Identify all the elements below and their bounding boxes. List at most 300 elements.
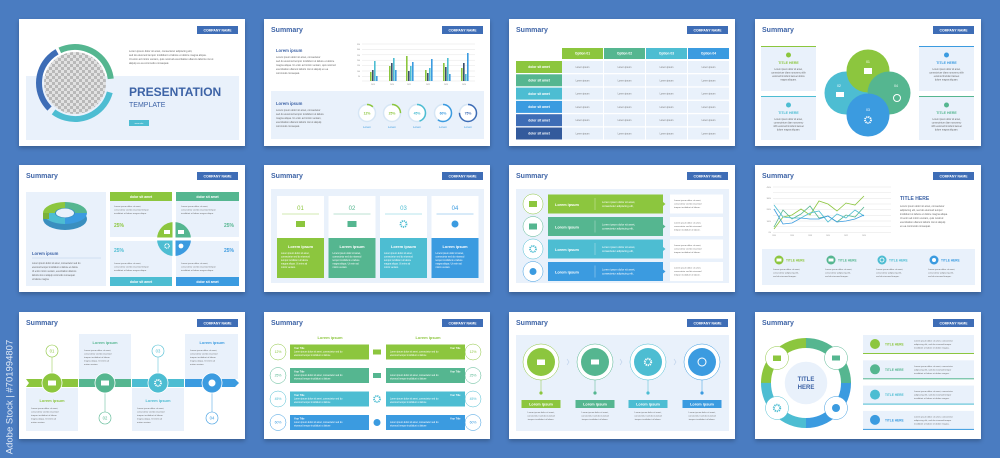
step panels: tempor incididunt ut labore [137,414,164,417]
right list: Lorem ipsum dolor sit amet, consectetur [914,390,953,393]
bar chart: 300 [357,49,360,51]
rows: 25% [470,374,476,378]
text block top: exercitation ullamco laboris nisi ut aliquip ex ea [276,68,329,71]
list rows: consectetur sed do eiusmod [674,270,702,273]
badge [442,172,483,180]
text block bottom: commodo consequat. [276,125,300,128]
rows: Your Title [450,347,461,350]
progress circles: 75% [465,111,471,115]
badge [197,319,238,327]
bottom panel items: Lorem ipsum dolor sit amet, [928,268,955,271]
heading: Summary [271,173,303,180]
table: Lorem ipsum [576,106,589,109]
bar chart: 150 [357,65,360,67]
progress circles: 60% [440,111,446,115]
bottom panel items: Lorem ipsum dolor sit amet, [825,268,852,271]
heading: Summary [516,320,548,327]
step panels: minim veniam. [31,422,45,424]
bottom panel items: TITLE HERE [889,258,908,262]
title [129,85,221,109]
quadrant cards: 25% [114,223,125,229]
progress circles: Lorem [439,125,448,129]
intro text: Lorem ipsum dolor sit amet, consectetur adipiscing elit, [129,49,192,53]
heading: Summary [516,173,548,180]
left panel with 3D donut [26,192,106,286]
left panel with 3D donut: Ut enim minim veniam, exercitation ullamco [32,270,77,273]
rows: Your Title [294,394,305,397]
venn circles: 03 [866,108,870,112]
step panels: Lorem ipsum [39,398,65,403]
badge [197,26,238,34]
table: Lorem ipsum [660,132,673,136]
cards: magna aliqua. Ut enim ad [332,262,359,266]
venn circles [824,50,910,136]
process steps: consectetur sed do eiusmod [634,414,662,418]
rows: eiusmod tempor incididunt ut labore [390,354,427,357]
badge: COMPANY NAME [449,322,477,326]
list rows: tempor incididunt ut labore. [674,274,701,276]
slide 7: list bars [509,165,735,292]
right list: adipiscing elit, sed do eiusmod tempor [914,394,951,397]
badge [442,319,483,327]
bottom panel items: TITLE HERE [941,258,960,262]
bottom panel items: consectetur adipiscing elit, [773,272,799,274]
progress circles: Lorem [363,125,372,129]
rows: eiusmod tempor incididunt ut labore [390,424,427,428]
line chart [767,187,891,237]
title text block: TITLE HERE [900,196,930,202]
heading: Summary [762,27,794,34]
list rows: Lorem ipsum dolor sit amet, [602,222,635,226]
table: Lorem ipsum [576,66,589,69]
quadrant cards: consectetur sed do eiusmod tempor [181,208,216,212]
process steps: Lorem ipsum [690,402,715,406]
process steps: Lorem ipsum dolor sit amet, [634,411,662,414]
list rows: Lorem ipsum dolor sit amet, [674,266,701,270]
cards: tempor incididunt ut labore [436,259,463,262]
bar chart: 2024 [462,84,466,86]
rows [270,344,481,430]
badge: COMPANY NAME [204,322,232,326]
photo ring [24,32,126,134]
bar chart: 2023 [444,84,448,86]
cards: Lorem ipsum [339,244,365,249]
heading: Summary [762,320,794,327]
bottom panel items: Lorem ipsum dolor sit amet, [773,268,800,271]
bottom panel items: sed do eiusmod tempor. [825,275,849,278]
rows: Your Title [450,370,461,374]
step panels: magna aliqua. Ut enim ad [84,360,110,362]
right list: incididunt ut labore et dolore magna. [914,422,950,425]
title text block: Ut enim ad minim veniam, quis nostrud [900,217,944,220]
badge: COMPANY NAME [940,29,968,33]
heading: Summary [26,320,58,327]
text block bottom: magna aliqua. Ut enim ad minim veniam, [276,117,322,120]
text block bottom: exercitation ullamco laboris nisi ut aliquip [276,121,322,124]
badge [933,26,974,34]
list rows: Lorem ipsum dolor sit amet, [674,199,701,202]
step panels: tempor incididunt ut labore [31,414,58,417]
timeline nodes: 03 [156,348,161,354]
cards: Lorem ipsum dolor sit amet, [281,252,310,255]
progress circles: Lorem [464,125,473,129]
rows: eiusmod tempor incididunt ut labore [390,378,427,380]
right list: incididunt ut labore et dolore magna. [914,372,950,375]
badge: COMPANY NAME [940,322,968,326]
progress circles: 25% [389,111,395,115]
cards: magna aliqua. Ut enim ad [436,262,462,266]
venn circles: 02 [837,84,841,88]
bar chart: 50 [358,76,360,78]
title text block: incididunt ut labore et dolore magna aliqua. [900,213,948,216]
bottom panel items: consectetur adipiscing elit, [928,272,954,274]
side boxes: dolore magna aliquam. [935,78,959,82]
right list: adipiscing elit, sed do eiusmod tempor [914,368,951,371]
timeline nodes [42,345,222,424]
process steps: Lorem ipsum [636,402,661,406]
table: Lorem ipsum [618,119,631,122]
bar chart: 2019 [371,84,375,86]
table: Lorem ipsum [702,132,715,136]
text block top: magna aliqua. Ut enim ad minim veniam, quis nostrud [276,64,336,67]
right list: TITLE HERE [885,418,904,422]
rows: 12% [275,350,281,354]
cards: minim veniam. [436,267,451,269]
quadrant cards: dolor sit amet [196,195,219,199]
progress circles [358,104,476,129]
step panels: consectetur sed do eiusmod [190,352,218,356]
process steps: Lorem ipsum [529,402,554,406]
list rows: tempor incididunt ut labore. [674,251,701,254]
table [516,48,729,140]
quadrant cards: dolor sit amet [130,195,153,199]
slide 11: process circles [509,312,735,439]
progress circles: Lorem [388,125,397,129]
list rows: Lorem ipsum dolor sit amet, [674,222,701,224]
step panels: magna aliqua. Ut enim ad [190,360,216,362]
slide 10: percentage rows [264,312,490,439]
ring: TITLE [798,377,814,383]
title text block [900,196,948,228]
slide 8: line chart [755,165,981,292]
panel [516,335,729,431]
table: dolor sit amet [528,78,551,82]
title text block: exercitation ullamco laboris nisi ut aliquip [900,221,946,224]
rows: 45% [275,397,281,401]
table: dolor sit amet [528,132,551,136]
list rows: Lorem ipsum dolor sit amet, [602,245,635,249]
bar chart [357,44,475,86]
cards: Lorem ipsum [442,244,468,249]
rows: Lorem ipsum dolor sit amet, consectetur sed do [294,398,343,400]
step panels: magna aliqua. Ut enim ad [137,418,163,420]
panel [271,189,484,283]
right list: incididunt ut labore et dolore magna. [914,397,950,400]
step panels: consectetur sed do eiusmod [137,410,165,414]
quadrant cards: 25% [224,248,235,254]
process steps: consectetur sed do eiusmod [688,414,716,418]
rows: Your Title [294,370,305,374]
line chart: 1996 [790,235,794,237]
step panels: Lorem ipsum dolor sit amet, [84,349,111,352]
rows: 45% [470,397,476,401]
side boxes: dolore magna aliquam. [777,128,801,132]
heading: Summary [271,27,303,34]
timeline nodes: 04 [210,416,215,420]
bottom panel items: TITLE HERE [838,258,857,262]
rows: Lorem ipsum dolor sit amet, consectetur sed do [294,374,343,377]
side boxes: Lorem ipsum dolor sit amet, [774,68,803,71]
cards: magna aliqua. Ut enim ad [384,262,411,266]
rows: 25% [275,374,281,378]
process steps: Lorem ipsum dolor sit amet, [528,411,555,414]
list rows: Lorem ipsum [555,226,579,230]
badge: COMPANY NAME [449,175,477,179]
badge [933,172,974,180]
cards: consectetur sed do eiusmod [436,256,465,258]
table: Lorem ipsum [618,132,631,136]
right list: Lorem ipsum dolor sit amet, consectetur [914,365,953,368]
table: Lorem ipsum [702,119,715,122]
intro text: aliquip ex ea commodo consequat. [129,61,169,65]
bar chart: 350 [357,44,360,46]
bar chart: 200 [357,60,360,62]
list rows [523,194,723,282]
cards: Lorem ipsum dolor sit amet, [436,252,464,255]
progress circles: 12% [364,111,370,115]
side boxes: Lorem ipsum dolor sit amet, [932,118,961,121]
step panels: minim veniam. [190,364,204,366]
left panel with 3D donut: Lorem ipsum dolor sit amet, consectetur sed do [32,262,81,265]
bar chart: 100 [357,71,360,73]
slide 3: table [509,19,735,146]
line chart: 200% [767,209,771,211]
rows: Lorem ipsum dolor sit amet, consectetur sed do [390,374,439,377]
bottom panel items: Lorem ipsum dolor sit amet, [876,268,903,271]
rows: Lorem ipsum dolor sit amet, consectetur sed do [294,350,343,354]
slide 5: donut quadrants [19,165,245,292]
quadrant cards: consectetur sed do eiusmod tempor [114,266,149,268]
badge: COMPANY NAME [694,29,722,33]
rows: eiusmod tempor incididunt ut labore [390,401,427,404]
light panel [26,76,239,140]
intro text: sed do eiusmod tempor incididunt ut labore et dolore magna aliqua. [129,53,207,57]
side boxes: TITLE HERE [778,111,799,115]
rows: Your Title [294,418,305,420]
table: Lorem ipsum [660,79,673,82]
cards: tempor incididunt ut labore [384,259,412,262]
table: dolor sit amet [528,105,551,109]
progress circles: 45% [414,111,420,115]
left panel with 3D donut: ut labore magna. [32,278,50,281]
step panels: Lorem ipsum dolor sit amet, [137,407,164,410]
table: Lorem ipsum [702,66,715,69]
text block bottom: Lorem ipsum [276,101,303,106]
step panels: minim veniam. [84,364,98,366]
line chart: 450% [767,187,771,189]
side boxes: consectetuer diam nonummy nibh [771,72,806,74]
list rows: consectetur sed do eiusmod [674,248,702,250]
process steps: tempor incididunt ut labore. [635,418,662,421]
cards: 03 [400,206,407,212]
line chart: 2024 [862,235,866,237]
right list: adipiscing elit, sed do eiusmod tempor [914,419,951,422]
badge [197,172,238,180]
bottom panel items: sed do eiusmod tempor. [773,275,797,278]
right list: TITLE HERE [885,393,904,397]
slide 6: four cards [264,165,490,292]
step panels: Lorem ipsum dolor sit amet, [190,349,217,352]
list rows: tempor incididunt ut labore. [674,206,701,209]
side boxes: dolore magna aliquam. [935,128,959,132]
side boxes: consectetuer diam nonummy nibh [929,72,964,74]
quadrant cards [110,192,239,286]
table: Lorem ipsum [618,106,631,109]
button: www.site [135,122,144,125]
cards: minim veniam. [332,267,348,269]
side boxes: TITLE HERE [936,61,957,65]
text block top: Lorem ipsum dolor sit amet, consectetur [276,56,321,59]
bar chart: 2021 [407,84,411,86]
line chart: 2020 [826,235,830,237]
rows: Lorem ipsum dolor sit amet, consectetur sed do [390,398,439,400]
quadrant cards: 25% [114,248,125,254]
rows: Your Title [294,347,305,350]
table: Lorem ipsum [702,106,715,109]
step panels: consectetur sed do eiusmod [84,352,112,356]
cards: 02 [349,206,356,212]
slide 9: timeline [19,312,245,439]
quadrant cards: Lorem ipsum dolor sit amet, [114,262,141,265]
cards: tempor incididunt ut labore [332,259,360,262]
step panels: Lorem ipsum [199,340,225,345]
process steps: Lorem ipsum dolor sit amet, [582,411,609,414]
bottom panel items [762,249,975,285]
step panels: tempor incididunt ut labore [84,356,111,359]
list rows: consectetur sed do eiusmod [674,225,702,228]
process steps: Lorem ipsum dolor sit amet, [688,411,716,414]
cards: minim veniam. [281,267,296,269]
badge [687,319,728,327]
table: dolor sit amet [528,65,551,69]
progress circles: Lorem [413,125,422,129]
panel [516,189,729,283]
line chart: 0% [769,232,771,234]
table: Lorem ipsum [660,66,673,69]
text block top: Lorem ipsum [276,48,303,53]
badge: COMPANY NAME [940,175,968,179]
text block bottom [276,101,324,128]
process steps: consectetur sed do eiusmod [581,414,609,418]
table: Option 02 [617,52,632,56]
title text block: ex ea commodo consequat. [900,225,931,228]
badge [933,319,974,327]
step panels: minim veniam. [137,422,151,424]
ring: HERE [798,385,814,391]
list rows: Lorem ipsum [555,270,579,274]
side boxes: nibh euismod tincidunt laoreet [773,125,804,128]
cards: magna aliqua. Ut enim ad [281,262,308,266]
quadrant cards: dolor sit amet [130,280,153,284]
cards: consectetur sed do eiusmod [384,256,413,258]
side boxes: euismod tincidunt laoreet [934,75,960,78]
list rows: consectetur adipiscing elit, [602,249,634,253]
rows: Lorem ipsum dolor sit amet, consectetur sed do [294,421,343,424]
rows: eiusmod tempor incididunt ut labore [294,424,331,428]
heading: Summary [271,320,303,327]
line chart: 1994 [772,235,776,237]
slide 12: ring diagram [755,312,981,439]
step panels [26,334,238,431]
text block top: sed do eiusmod tempor incididunt ut labore et dolore [276,60,335,63]
text block bottom: sed do eiusmod tempor incididunt ut labore [276,113,324,116]
quadrant cards: Lorem ipsum dolor sit amet, [114,205,141,208]
button [129,120,149,126]
list rows: Lorem ipsum dolor sit amet, [602,200,635,204]
rows: Lorem ipsum dolor sit amet, consectetur sed do [390,350,439,354]
heading: Summary [516,27,548,34]
intro text: Ut enim ad minim veniam, quis nostrud exercitation ullamco laboris nisi ut [129,57,214,61]
column headings: Lorem ipsum [415,335,441,340]
right list: Lorem ipsum dolor sit amet, consectetur [914,415,953,418]
table: Lorem ipsum [576,93,589,96]
side boxes: consectetuer diam nonummy [774,122,804,124]
bottom panel items: TITLE HERE [786,258,805,262]
quadrant cards: incididunt ut labore magna aliqua. [114,269,147,272]
badge [687,26,728,34]
rows: eiusmod tempor incididunt ut labore [294,354,331,357]
side boxes: TITLE HERE [778,61,799,65]
table: Lorem ipsum [660,119,673,122]
heading: Summary [26,173,58,180]
line chart: 300% [767,198,771,200]
table: Lorem ipsum [618,93,631,96]
line chart: 2022 [844,235,848,237]
quadrant cards: Lorem ipsum dolor sit amet, [181,205,208,208]
side boxes: consectetuer diam nonummy [932,122,962,124]
line chart: 100% [767,221,771,223]
bottom panel items: sed do eiusmod tempor. [876,275,900,278]
quadrant cards: dolor sit amet [196,280,219,284]
quadrant cards: consectetur sed do eiusmod tempor [114,208,149,212]
list rows: Lorem ipsum dolor sit amet, [674,244,701,247]
cards: Lorem ipsum dolor sit amet, [384,252,413,255]
process steps: consectetur sed do eiusmod [527,414,555,418]
side boxes: euismod tincidunt laoreet dolore [772,75,806,78]
cards: 04 [452,206,459,212]
right list: TITLE HERE [885,342,904,346]
table: dolor sit amet [528,118,551,122]
left panel with 3D donut: eiusmod tempor incididunt ut labore et dolore [32,266,79,269]
cards: Lorem ipsum dolor sit amet, [332,252,361,255]
bottom panel items: consectetur adipiscing elit, [825,272,851,274]
table: Lorem ipsum [660,93,673,96]
badge: COMPANY NAME [449,29,477,33]
rows: eiusmod tempor incididunt ut labore [294,401,331,404]
left panel with 3D donut: Lorem ipsum [32,251,59,256]
quadrant cards: 25% [224,223,235,229]
timeline nodes: 01 [50,348,55,354]
list rows: consectetur sed do eiusmod [674,202,702,206]
cards: consectetur sed do eiusmod [281,256,310,258]
bottom panel [271,91,484,139]
title: TEMPLATE [129,102,166,109]
rows: Lorem ipsum dolor sit amet, consectetur sed do [390,421,439,424]
title: PRESENTATION [129,85,221,99]
side boxes: magna aliquam. [780,80,797,82]
step panels: magna aliqua. Ut enim ad [31,418,57,420]
quadrant cards: consectetur sed do eiusmod tempor [181,266,216,268]
